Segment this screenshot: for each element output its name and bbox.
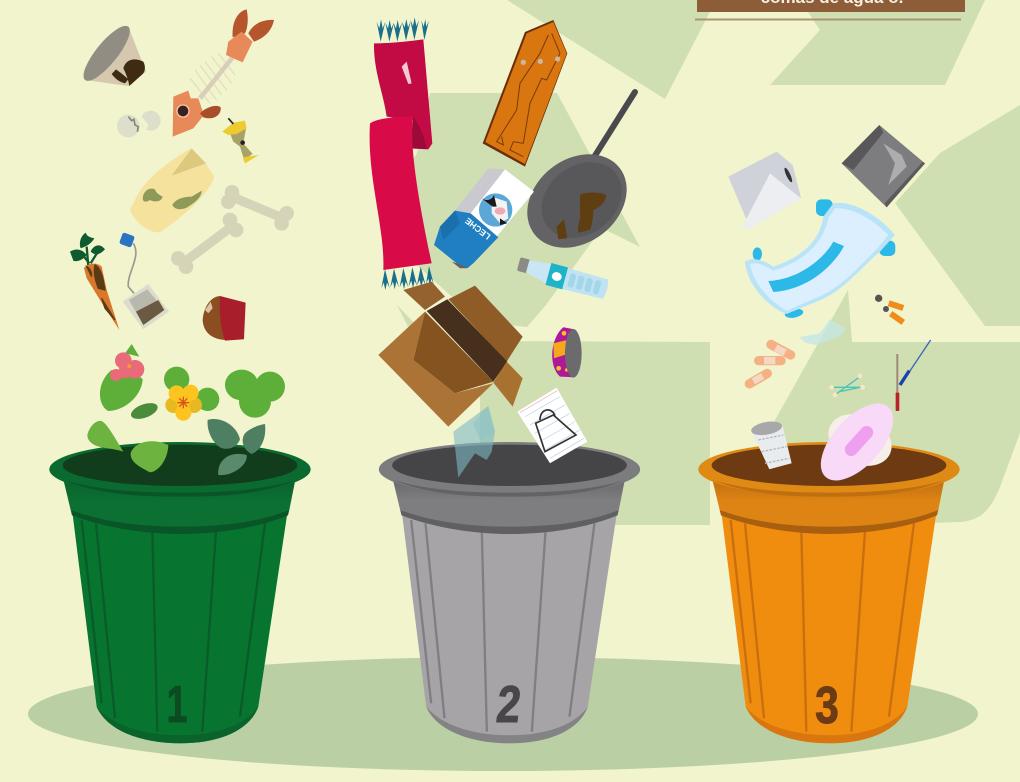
top banner — [695, 0, 965, 20]
icon: milk carton: LECHE — [463, 216, 492, 242]
icon: broken glass — [453, 406, 495, 478]
icon: syringes — [896, 340, 931, 411]
icon: cardboard box — [378, 282, 523, 427]
icon: frying pan — [509, 92, 645, 267]
icon: red scarf — [370, 17, 434, 290]
bin 3 orange — [698, 442, 960, 743]
icon: plastic wrapper — [799, 319, 846, 345]
icon: diaper — [745, 199, 895, 319]
icon: cotton swabs — [829, 374, 865, 397]
icon: plants and flowers — [87, 344, 285, 475]
bin 2 grey — [379, 442, 640, 743]
icon: tin can — [552, 327, 582, 378]
icon: sanitary pad — [808, 391, 906, 493]
icon: bones — [171, 185, 294, 274]
bin 1 number: 1 — [167, 675, 187, 733]
icon: band-aids — [743, 338, 797, 390]
icon: mouldy cheese — [130, 148, 214, 232]
icon: fish skeleton — [173, 9, 274, 137]
icon: notepad paper — [517, 388, 587, 463]
icon: apple core — [222, 118, 259, 163]
icon: water bottle — [515, 255, 610, 301]
icon: milk carton — [434, 168, 534, 268]
icon: carrot — [70, 233, 119, 330]
ground shadow — [28, 657, 978, 771]
icon: paper cup — [750, 419, 792, 469]
icon: muffin — [203, 296, 246, 341]
icon: foil packet — [842, 125, 925, 207]
bin 2 number: 2 — [494, 676, 524, 734]
background recycling arrows — [382, 0, 1020, 525]
bin 3 number: 3 — [815, 677, 839, 735]
icon: cigarette butts — [875, 295, 905, 325]
icon: coffee cup with stain — [77, 20, 146, 87]
icon: wooden board — [483, 20, 567, 167]
icon: egg shell — [117, 111, 161, 137]
bin 1 green — [49, 442, 311, 743]
icon: tea bag — [119, 232, 169, 329]
icon: toilet paper roll — [728, 152, 801, 230]
